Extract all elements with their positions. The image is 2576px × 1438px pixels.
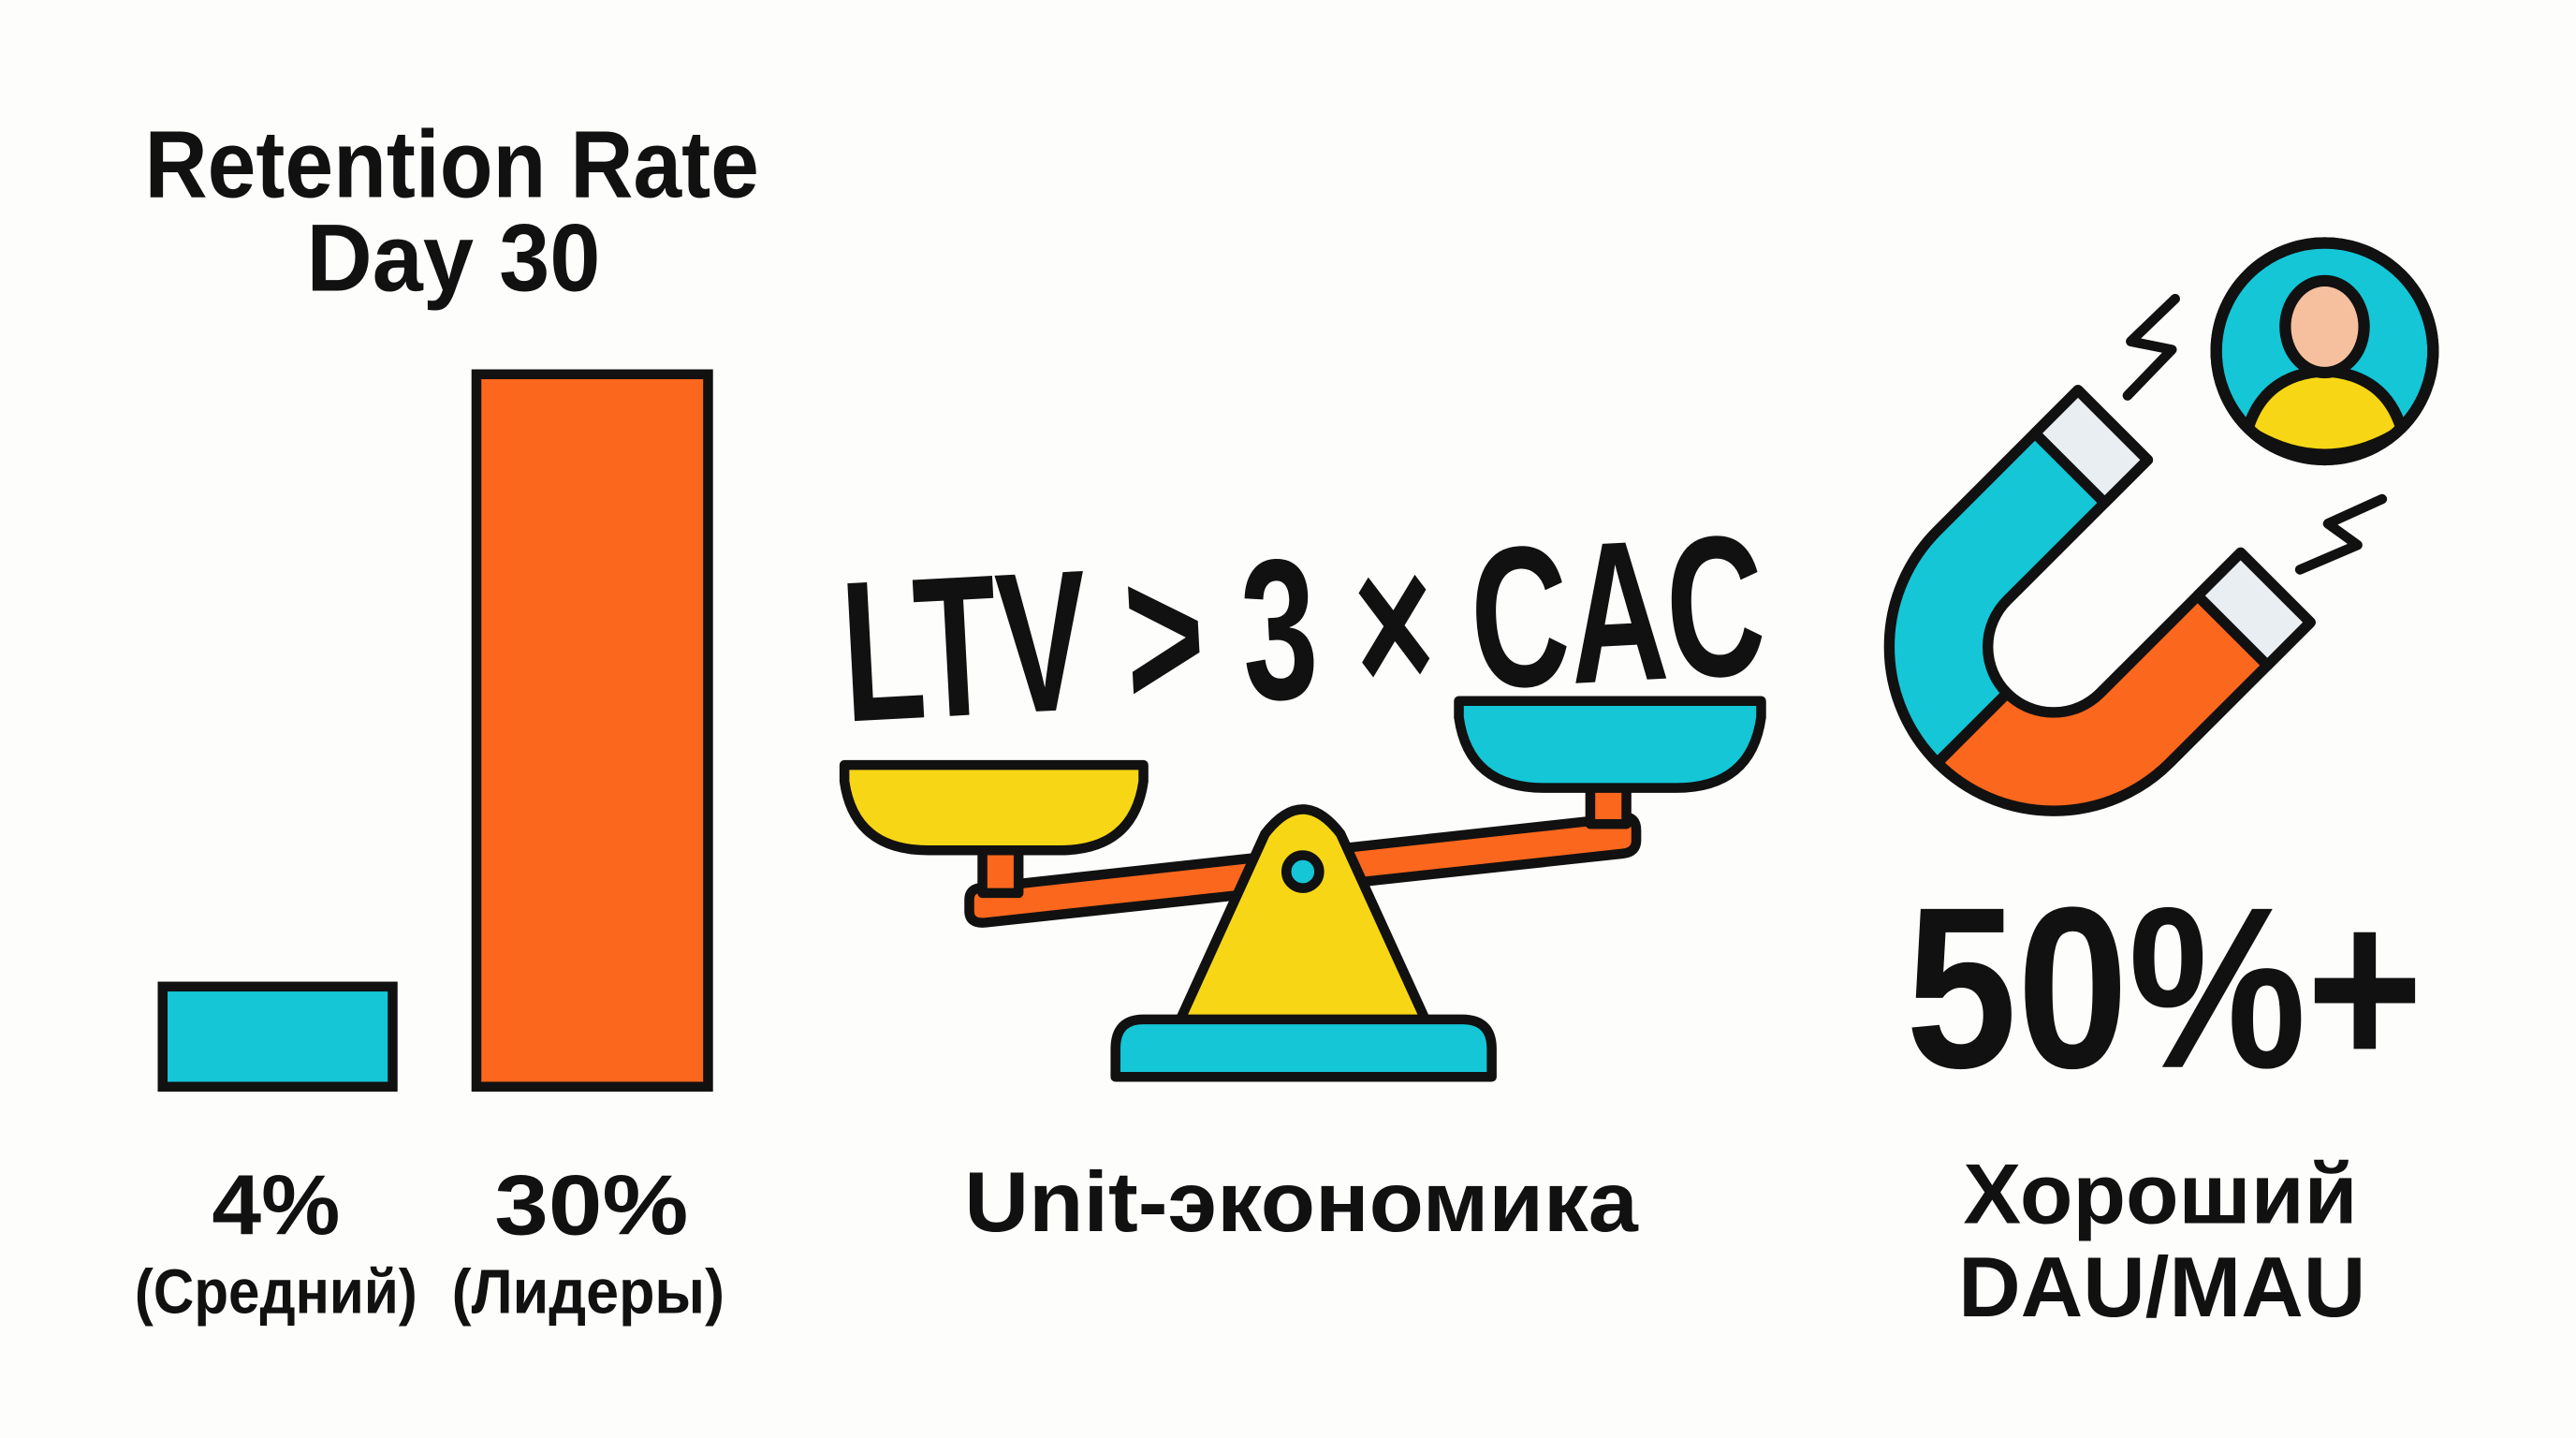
base <box>1116 1020 1492 1077</box>
icon: user avatar <box>2217 243 2433 460</box>
bar: leaders 30% <box>476 374 708 1087</box>
icon: magnet <box>1822 390 2310 879</box>
formula LTV > 3 x CAC: LTV > 3 × CAC <box>836 492 1770 765</box>
right stem <box>1590 782 1627 824</box>
right pan <box>1459 701 1761 788</box>
title: Day 30 <box>306 204 600 311</box>
label: 30% leaders <box>452 1158 724 1328</box>
icon: balance scale <box>844 701 1761 1077</box>
label: 4% average: (Средний) <box>135 1258 417 1328</box>
beam <box>970 817 1636 923</box>
label: good DAU/MAU: Хороший <box>1963 1146 2358 1241</box>
title <box>144 110 759 311</box>
left pan <box>844 765 1144 850</box>
bar chart <box>163 374 708 1087</box>
left stem <box>983 847 1018 893</box>
label: good DAU/MAU <box>1958 1146 2365 1335</box>
title: Retention Rate <box>144 110 759 217</box>
label: 30% leaders: (Лидеры) <box>452 1258 724 1328</box>
stat: 50%+: 50%+ <box>1906 860 2423 1117</box>
icon: magnetic sparks <box>2128 299 2382 569</box>
label: 4% average <box>135 1158 417 1328</box>
bar: average 4% <box>163 987 392 1087</box>
label: good DAU/MAU: DAU/MAU <box>1958 1240 2365 1335</box>
label: 30% leaders: 30% <box>494 1158 688 1254</box>
label: 4% average: 4% <box>212 1158 340 1254</box>
pivot <box>1286 856 1319 888</box>
label: unit economics: Unit-экономика <box>964 1154 1639 1250</box>
fulcrum <box>1179 809 1426 1021</box>
